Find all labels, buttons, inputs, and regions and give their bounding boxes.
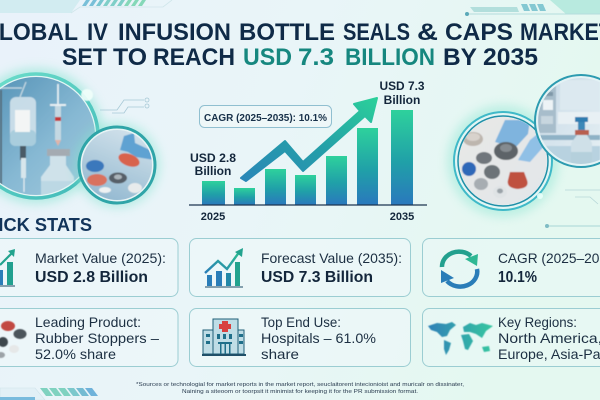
start value label: Billion (195, 164, 231, 178)
card: top end use: Hospitals – 61.0% (261, 330, 376, 346)
start value label (190, 151, 236, 178)
title: BY (443, 44, 477, 71)
image: bottle caps held by gloved hand (74, 122, 160, 208)
card: CAGR: 10.1% (498, 269, 537, 286)
title: REACH (153, 44, 235, 71)
icon: forecast chart (205, 248, 243, 287)
card: top end use (190, 308, 410, 366)
footnote (136, 382, 465, 395)
year labels: 2025 (201, 211, 225, 223)
title: 2035 (483, 44, 538, 71)
card: key regions (422, 308, 600, 366)
title: & (417, 19, 438, 46)
card: market value 2025 (0, 238, 178, 296)
year labels (201, 211, 414, 223)
CAGR pill: CAGR (2025–2035): 10.1% (204, 113, 327, 124)
icon: hospital (202, 319, 246, 355)
image: hospital room with vial (535, 75, 600, 167)
card: key regions: Key Regions: (498, 314, 577, 330)
card: forecast value 2035: USD 7.3 Billion (261, 269, 373, 286)
footnote: Naining a siteoom or toorpsit it minimist for keeping it for the PR submission format. (182, 389, 419, 395)
CAGR pill (200, 106, 332, 128)
card: leading product (0, 308, 178, 366)
decorative circuit lines left (100, 98, 149, 113)
card: market value 2025: Market Value (2025): (35, 250, 166, 266)
end value label: Billion (384, 93, 420, 107)
title: SET (62, 44, 107, 71)
title: USD (243, 44, 292, 71)
card: forecast value 2035 (190, 238, 410, 296)
icon: growth chart (0, 249, 15, 286)
card: leading product: 52.0% share (35, 346, 116, 362)
title: INFUSION (118, 19, 231, 46)
card: leading product: Leading Product: (35, 314, 141, 330)
chart: market growth bars with arrow (189, 79, 427, 223)
title: BILLION (345, 44, 435, 71)
title: SEALS (343, 19, 410, 46)
card: leading product: Rubber Stoppers – (35, 330, 159, 346)
title: 7.3 (298, 44, 334, 71)
title (0, 19, 600, 71)
growth arrow (241, 98, 377, 181)
end value label (380, 79, 425, 107)
title: IV (87, 19, 109, 46)
icon: world map (428, 322, 493, 355)
title: CAPS (445, 19, 513, 46)
card: top end use: Top End Use: (261, 314, 341, 330)
title: BOTTLE (239, 19, 335, 46)
card: market value 2025: USD 2.8 Billion (35, 269, 148, 286)
image: seals and hospital vial (447, 105, 559, 217)
icon: rubber stoppers (0, 321, 26, 358)
end value label: USD 7.3 (380, 79, 425, 93)
year labels: 2035 (390, 211, 414, 223)
bars (202, 110, 413, 205)
card: key regions: North America, (498, 330, 600, 346)
card: forecast value 2035: Forecast Value (2035): (261, 250, 402, 266)
decorative circuit right (565, 190, 600, 204)
footnote: *Sources or technologial for market reports in the market report, seuclaitorent intecionioist and muricalr on dissinater, (136, 382, 465, 388)
card: top end use: share (261, 346, 299, 362)
icon: circular arrows (441, 252, 478, 287)
start value label: USD 2.8 (190, 151, 236, 165)
title: TO (113, 44, 147, 71)
axis line (189, 204, 427, 206)
image: IV bag, syringe and vial with caps (0, 68, 105, 205)
card: CAGR (422, 238, 600, 296)
